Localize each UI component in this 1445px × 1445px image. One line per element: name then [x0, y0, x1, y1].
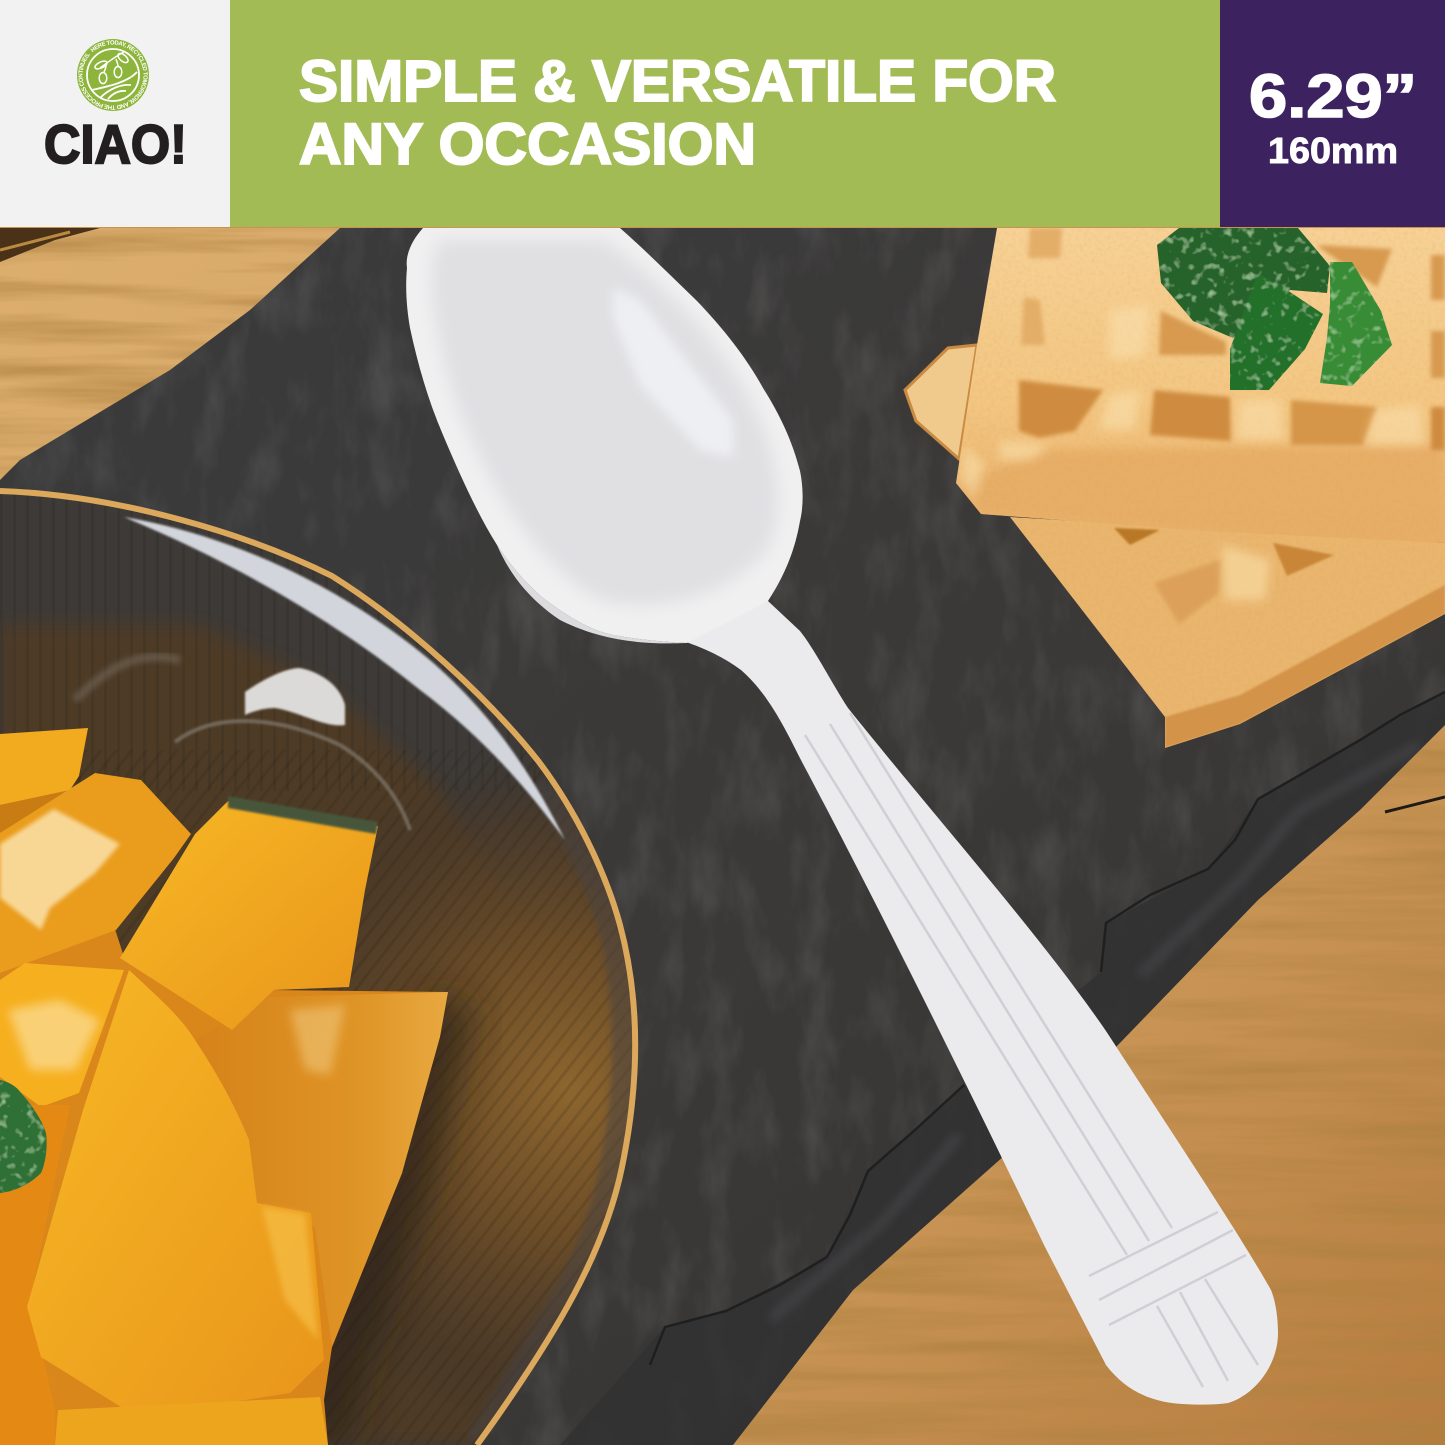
spoon handle [680, 600, 1278, 1405]
size in inches: 6.29” [1249, 62, 1417, 130]
header: size badge [1220, 0, 1445, 227]
waffles [905, 228, 1445, 755]
size in millimetres: 160mm [1268, 130, 1398, 171]
top waffle [950, 228, 1445, 548]
logo wordmark: CIAO! [44, 113, 187, 175]
surface glare [245, 668, 345, 725]
dark inner rim band [480, 780, 629, 1445]
spoon bowl [406, 228, 803, 643]
lower waffle [1000, 510, 1445, 755]
mango base fill [0, 790, 448, 1445]
header: headline banner [230, 0, 1220, 227]
amber tint in bowl base [1, 622, 498, 1444]
icon: mint leaf in bowl [0, 1080, 47, 1193]
icon: mint leaves on waffle [1157, 228, 1392, 390]
header: logo panel [0, 0, 230, 227]
white glass reflection along rim [124, 517, 565, 840]
mango pieces [0, 728, 448, 1445]
shadow beside mango [320, 1000, 450, 1445]
glass bowl with gold rim [0, 491, 640, 1445]
mango highlight [0, 809, 120, 930]
headline text: SIMPLE & VERSATILE FOR [299, 49, 1056, 114]
white plastic spoon [406, 228, 1278, 1405]
headline text: ANY OCCASION [299, 112, 756, 177]
icon: Ciao round green badge: HERE TODAY, RECYCLED TOMORROW, AND THE PROCESS CONTINUES. [78, 40, 148, 110]
lower left waffle edge [905, 345, 977, 459]
